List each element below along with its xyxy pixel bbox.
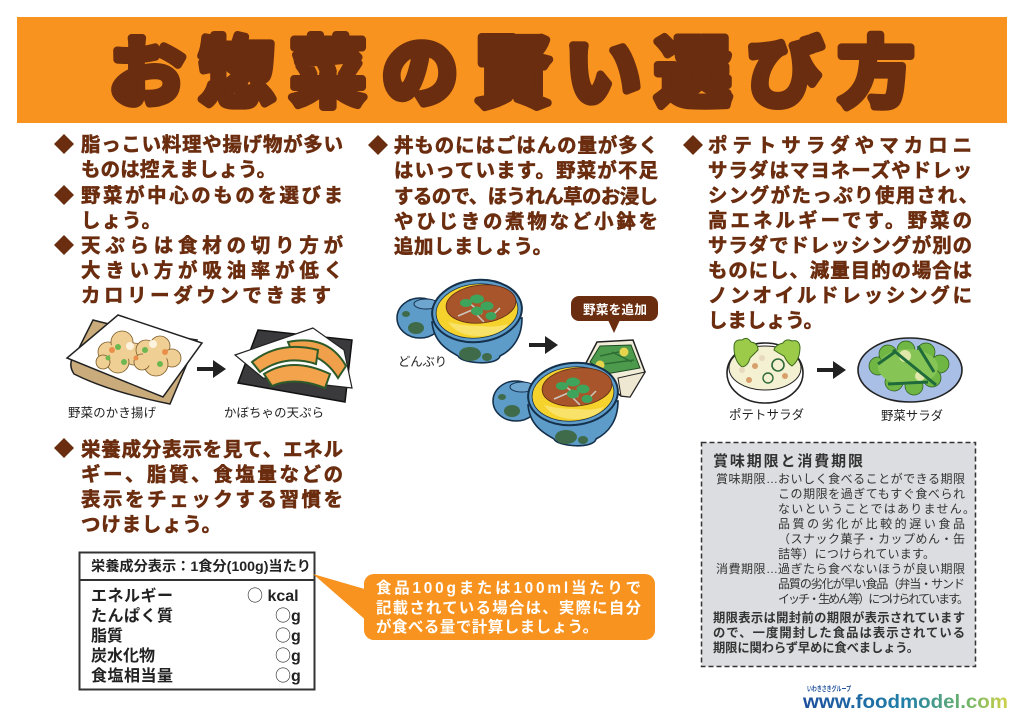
panel: column 3 tips: ものにし、減量目的の場合は xyxy=(708,259,972,282)
panel: best-before and use-by dates: おいしく食べることができる期限 xyxy=(778,471,965,486)
title text: び xyxy=(747,32,823,117)
illustration: vegetable kakiage xyxy=(67,315,202,404)
title text: い xyxy=(565,32,641,117)
illustration: pumpkin tempura xyxy=(235,328,352,402)
panel: column 2 tips: 追加しましょう。 xyxy=(394,236,552,258)
panel: best-before and use-by dates: 賞味期限… xyxy=(716,472,778,486)
panel: best-before and use-by dates: 詰等）につけられています。 xyxy=(778,546,935,561)
panel: column 2 tips: するので、ほうれん草のお浸し xyxy=(394,186,658,208)
arrow xyxy=(529,336,558,354)
panel: column 3 tips: ノンオイルドレッシングに xyxy=(708,284,972,307)
panel: column 3 tips: ポテトサラダやマカロニ xyxy=(708,134,972,157)
title text: 選 xyxy=(655,32,731,117)
nutrition table: ○ kcal xyxy=(247,582,299,606)
nutrition table: ○g xyxy=(275,642,301,666)
nutrition table: 栄養成分表示：1食分(100g)当たり xyxy=(91,558,311,574)
illustration: potato salad xyxy=(727,338,803,403)
panel: column 2 tips: やひじきの煮物など小鉢を xyxy=(394,211,658,233)
nutrition table: ○g xyxy=(275,622,301,646)
panel: best-before and use-by dates: 品質の劣化が比較的遅い食品 xyxy=(778,516,965,531)
panel: column 3 tips xyxy=(683,134,978,332)
illustration: side dish xyxy=(585,340,645,397)
panel: best-before and use-by dates: イッチ・生めん等）につけられています。 xyxy=(778,592,969,606)
arrow xyxy=(197,360,226,378)
nutrition table xyxy=(79,552,315,690)
panel: best-before and use-by dates: 期限に関わらず早めに食べましょう。 xyxy=(713,640,919,655)
title text: の xyxy=(382,32,458,117)
panel: best-before and use-by dates: 消費期限… xyxy=(716,561,778,576)
callout: add vegetables: 野菜を追加 xyxy=(583,302,647,317)
title text xyxy=(109,32,914,117)
logo: www.foodmodel.com xyxy=(802,692,1008,713)
panel: best-before and use-by dates: ないということではありません。 xyxy=(778,502,975,516)
callout: per 100g: 食品100gまたは100ml当たりで xyxy=(376,578,641,597)
panel: column 1 tips: ものは控えましょう。 xyxy=(81,159,276,181)
callout: per 100g: が食べる量で計算しましょう。 xyxy=(376,617,598,636)
panel: column 3 tips: サラダはマヨネーズやドレッ xyxy=(708,159,972,182)
nutrition table: たんぱく質 xyxy=(91,607,173,625)
caption: pumpkin tempura: かぼちゃの天ぷら xyxy=(224,406,324,420)
arrow xyxy=(817,361,846,379)
panel: best-before and use-by dates: 過ぎたら食べないほうが良い期限 xyxy=(778,561,965,576)
illustration: vegetable salad xyxy=(858,338,962,402)
panel: column 1 tips: 天ぷらは食材の切り方が xyxy=(81,234,343,257)
panel: best-before and use-by dates xyxy=(702,442,976,666)
panel: column 1 tips xyxy=(54,133,343,307)
panel: column 1 tips: 脂っこい料理や揚げ物が多い xyxy=(81,133,343,156)
panel: column 3 tips: サラダでドレッシングが別の xyxy=(708,234,972,257)
panel: best-before and use-by dates: この期限を過ぎてもすぐ食べられ xyxy=(778,487,965,501)
panel: column 2 tips: はいっています。野菜が不足 xyxy=(394,159,658,182)
panel: column 2 tips: 丼ものにはごはんの量が多く xyxy=(394,134,658,157)
caption: vegetable salad: 野菜サラダ xyxy=(881,408,943,423)
logo: いわきさきグループ xyxy=(807,684,851,693)
panel: best-before and use-by dates: 賞味期限と消費期限 xyxy=(713,452,863,470)
title text: 惣 xyxy=(199,32,275,117)
panel: nutrition label tip: 栄養成分表示を見て、エネル xyxy=(81,438,343,461)
panel: column 3 tips: シングがたっぷり使用され、 xyxy=(708,184,978,207)
logo xyxy=(802,684,1008,713)
nutrition table: 食塩相当量 xyxy=(91,666,173,685)
title text: 方 xyxy=(838,32,914,117)
panel: column 3 tips: しましょう。 xyxy=(708,310,823,332)
caption: donburi: どんぶり xyxy=(398,355,447,369)
nutrition table: 脂質 xyxy=(91,627,123,645)
panel: nutrition label tip: ギー、脂質、食塩量などの xyxy=(81,464,343,486)
nutrition table: ○g xyxy=(275,662,301,686)
caption: kakiage: 野菜のかき揚げ xyxy=(68,405,157,420)
panel: column 1 tips: 野菜が中心のものを選びま xyxy=(81,184,343,207)
panel: nutrition label tip: つけましょう。 xyxy=(81,514,221,536)
panel: nutrition label tip: 表示をチェックする習慣を xyxy=(81,488,343,511)
panel: best-before and use-by dates: 期限表示は開封前の期限が表示されています xyxy=(713,610,965,625)
panel: column 1 tips: カロリーダウンできます xyxy=(81,284,331,307)
panel: best-before and use-by dates: （スナック菓子・カップめん・缶 xyxy=(778,532,965,546)
nutrition table: 炭水化物 xyxy=(91,647,155,665)
title text: 賢 xyxy=(475,32,551,117)
panel: best-before and use-by dates: ので、一度開封した食品は表示されている xyxy=(713,625,965,640)
title band xyxy=(17,17,1007,123)
panel: column 2 tips xyxy=(368,134,658,258)
caption: potato salad: ポテトサラダ xyxy=(729,407,804,422)
panel: best-before and use-by dates: 品質の劣化が早い食品（弁当・サンド xyxy=(778,576,965,591)
title text: お xyxy=(109,32,185,117)
panel: column 1 tips: 大きい方が吸油率が低く xyxy=(81,259,343,282)
illustration: donburi with side dish xyxy=(493,358,621,446)
illustration: donburi xyxy=(397,275,525,363)
callout: per 100g xyxy=(313,574,655,640)
callout: per 100g: 記載されている場合は、実際に自分 xyxy=(376,598,642,617)
panel: column 1 tips: しょう。 xyxy=(81,210,161,232)
callout: add vegetables xyxy=(571,296,658,333)
nutrition table: ○g xyxy=(275,602,301,626)
panel: nutrition label tip xyxy=(54,438,343,536)
nutrition table: エネルギー xyxy=(91,587,173,605)
panel: column 3 tips: 高エネルギーです。野菜の xyxy=(708,209,972,232)
title text: 菜 xyxy=(290,32,366,117)
